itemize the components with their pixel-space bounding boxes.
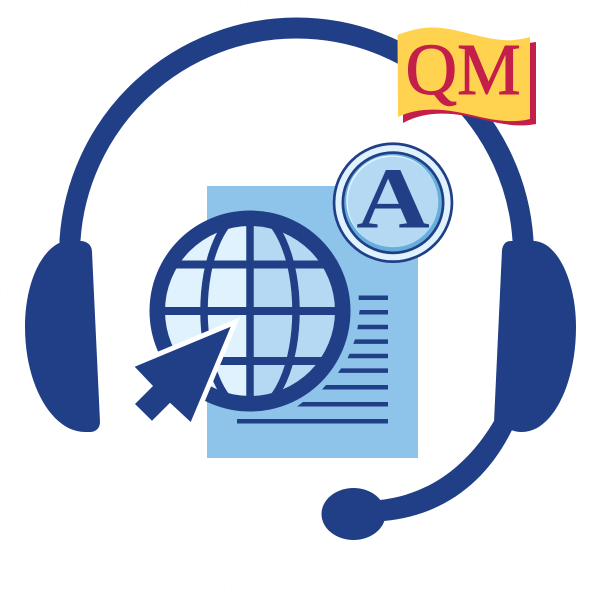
flag body [398, 27, 530, 121]
QM flag logo [398, 27, 536, 125]
globe left hemisphere [165, 226, 250, 396]
microphone head [322, 488, 386, 540]
cursor arrow [135, 327, 231, 422]
text lines on document [237, 296, 388, 424]
accessibility badge [333, 142, 453, 263]
badge outer ring [333, 142, 453, 263]
QM letters: QM [406, 29, 521, 110]
microphone boom [380, 421, 512, 521]
globe outer ring [150, 210, 350, 412]
left ear cup [25, 241, 100, 432]
headband [70, 28, 524, 250]
globe grid [165, 226, 335, 396]
right ear cup [494, 241, 576, 432]
letter A: A [356, 151, 430, 247]
flag shadow [403, 42, 536, 125]
globe [150, 210, 350, 412]
globe right hemisphere [250, 226, 335, 396]
headset [25, 28, 576, 540]
document page [207, 186, 418, 458]
